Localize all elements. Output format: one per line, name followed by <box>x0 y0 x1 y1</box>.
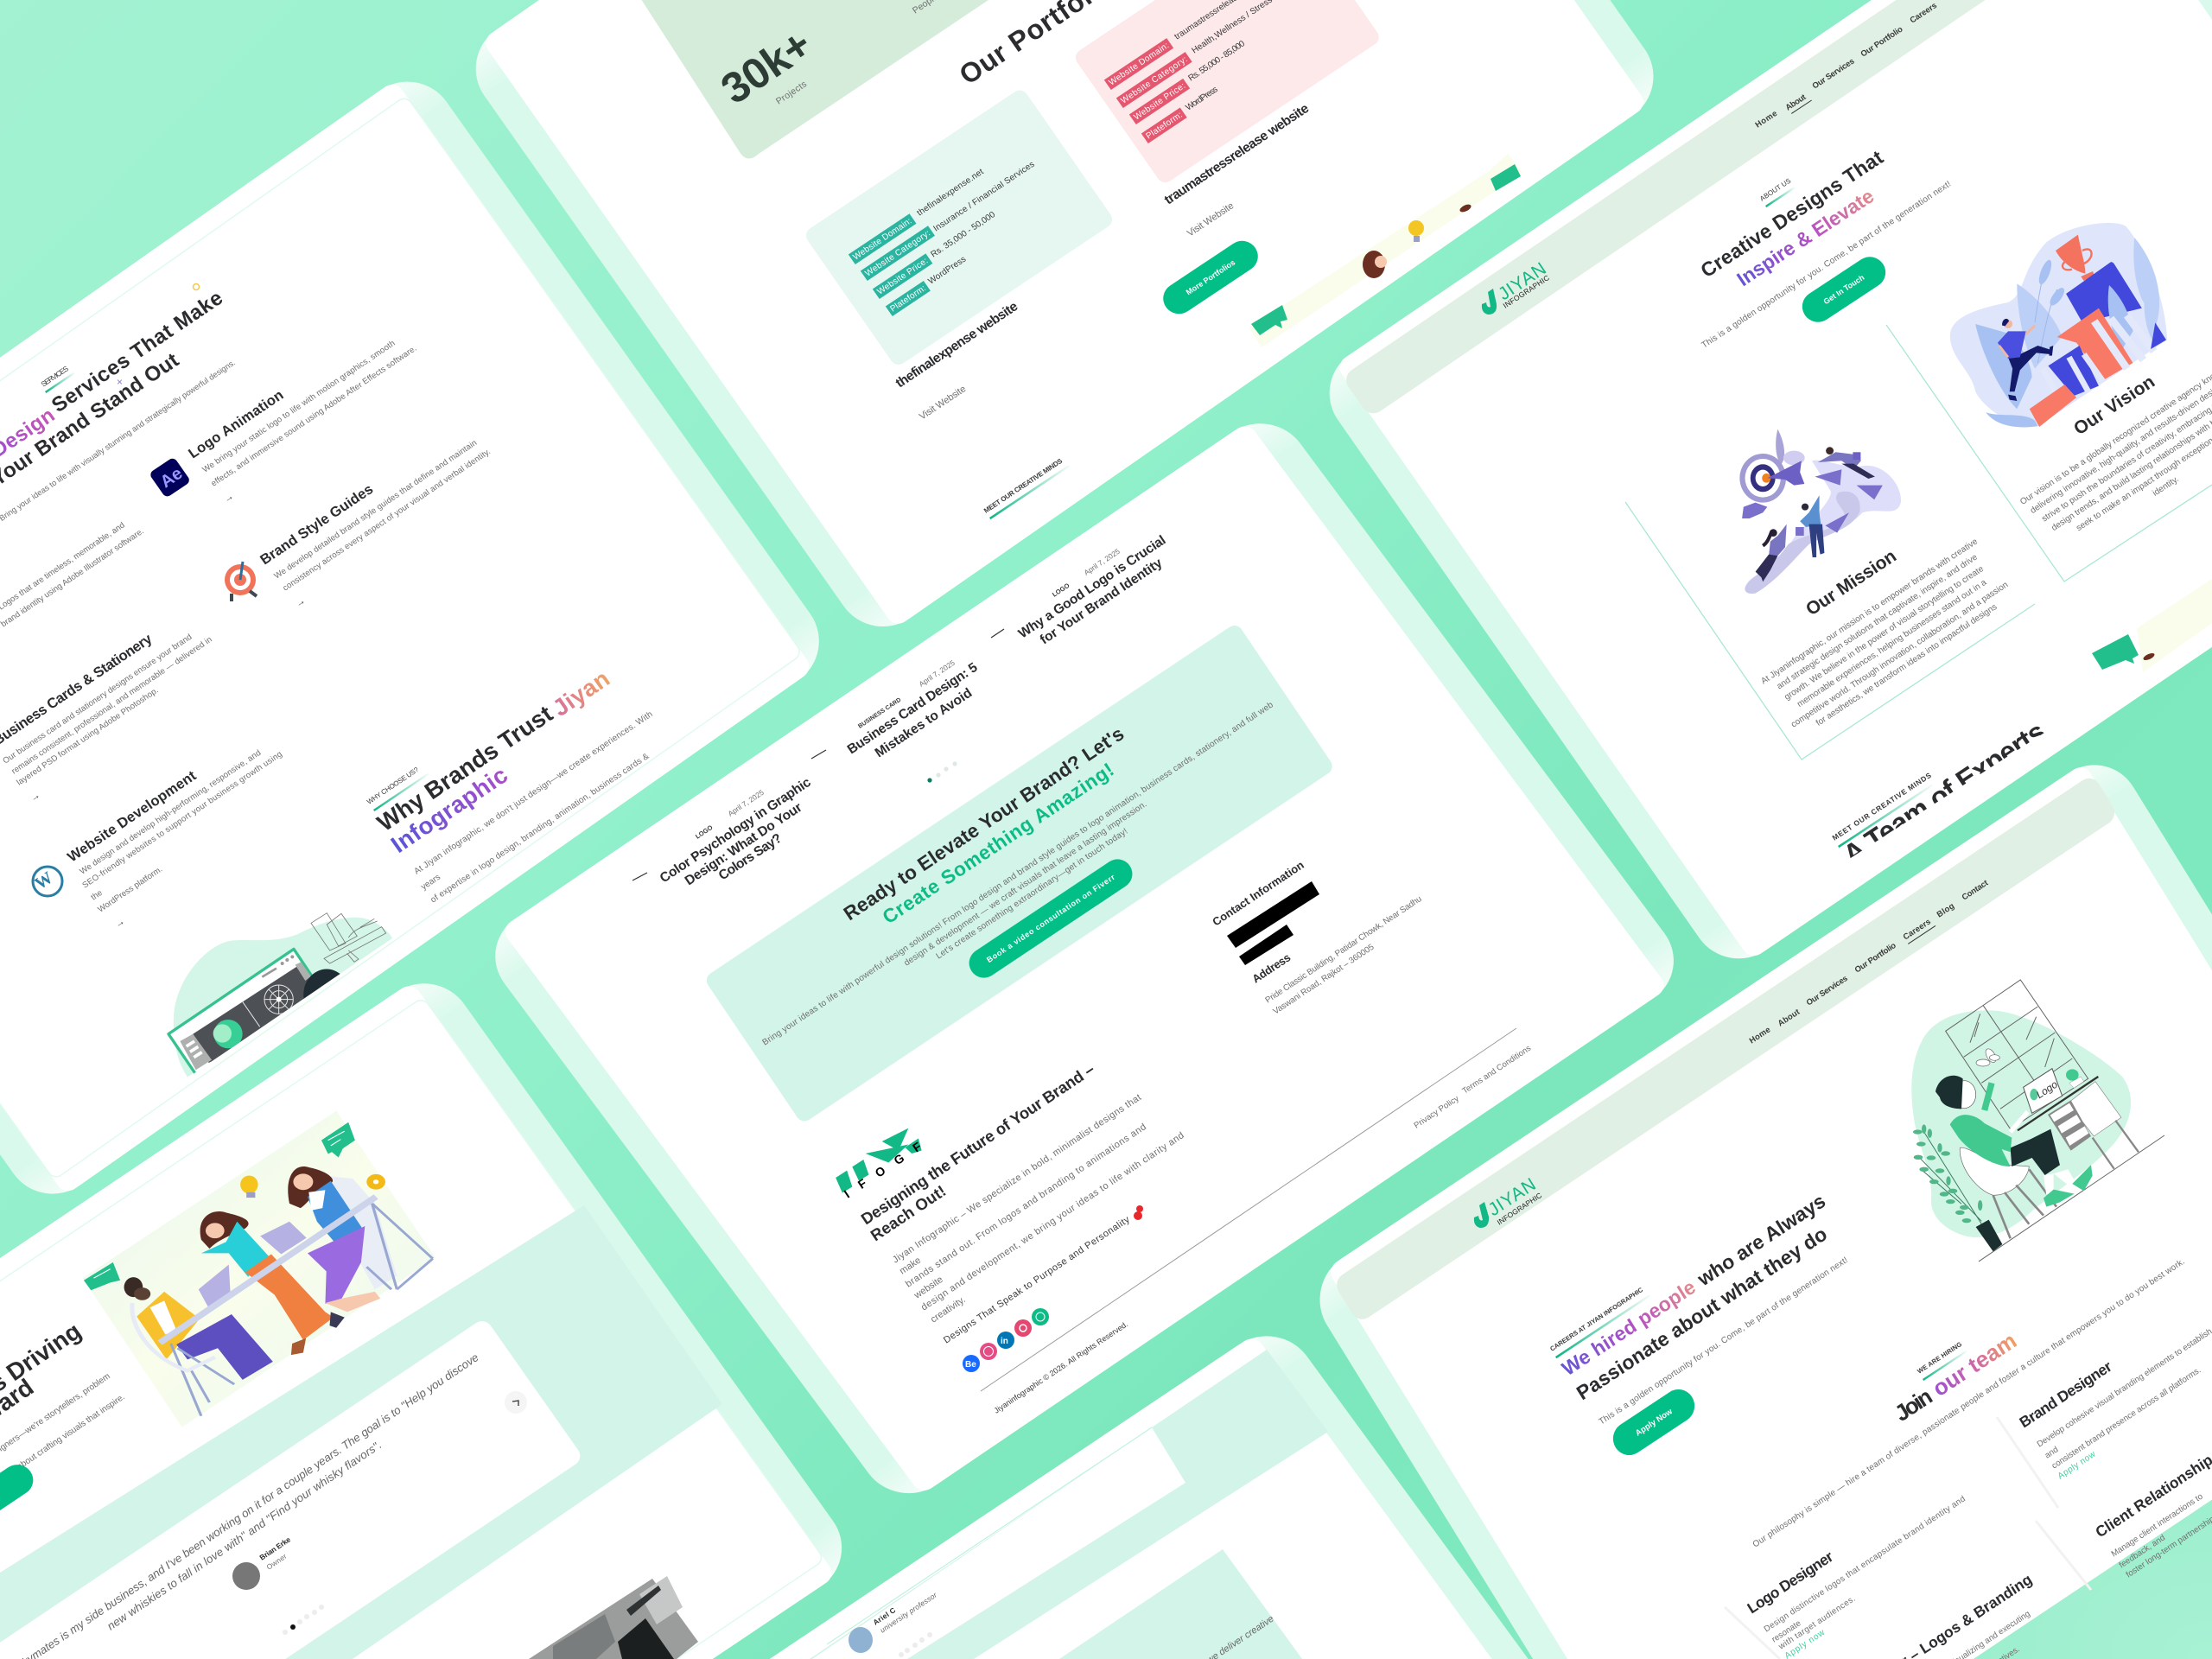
why choose us heading: Jiyan <box>548 664 614 721</box>
mission text: growth. We believe in the power of visual storytelling to create <box>1783 564 1986 702</box>
nav menu: Careers <box>1909 1 1939 25</box>
blog item: color psychology: LOGO <box>694 823 715 841</box>
cta panel <box>703 622 1336 1124</box>
label: services: SERVICES <box>39 364 70 389</box>
service: logo animation: → <box>222 492 236 505</box>
mint section <box>0 1205 722 1659</box>
button: apply now: Apply Now <box>1634 1407 1675 1439</box>
service: brand style guides: Brand Style Guides <box>257 481 376 568</box>
icon: after effects <box>149 456 191 499</box>
carousel arrow <box>505 1391 527 1414</box>
footer description: design and development, we bring your ideas to life with clarity and <box>919 1130 1186 1313</box>
logo: jiyan: JIYAN <box>1495 259 1550 304</box>
why choose us heading: Why Brands Trust <box>372 700 557 836</box>
job: brand designer: Brand Designer <box>2017 1357 2115 1431</box>
icon: target <box>225 562 257 601</box>
mission text <box>1759 537 2010 729</box>
nav menu: Home <box>1754 109 1779 130</box>
nav menu <box>1748 878 1991 1046</box>
why choose us heading: Infographic <box>386 761 512 858</box>
panel: bottom centre testimonials <box>469 1318 1707 1659</box>
label: meet our creative minds: MEET OUR CREATIVE MINDS <box>982 456 1065 515</box>
blog item: color psychology: Color Psychology in Graphic <box>658 775 814 886</box>
job: logo designer: resonate <box>1770 1618 1803 1645</box>
photo <box>529 1576 698 1659</box>
why choose us heading: WHY CHOOSE US? <box>365 766 421 806</box>
card: traumastressrelease: WordPress <box>1184 85 1220 112</box>
about intro text: This is a golden opportunity for you. Come, be part of the generation next! <box>1700 180 1953 350</box>
label: meet our creative minds: MEET OUR CREATIVE MINDS <box>1831 771 1933 842</box>
panel: contact footer <box>476 405 1693 1511</box>
job: brand designer: Develop cohesive visual branding elements to establish <box>2036 1326 2212 1450</box>
carousel dots <box>899 1632 932 1657</box>
footer description: creativity. <box>929 1294 968 1325</box>
card: traumastressrelease: Website Domain: <box>1107 41 1171 87</box>
footer divider <box>981 1028 1516 1391</box>
heading: join our team: Join <box>1890 1382 1937 1427</box>
mission text: At Jiyaninfographic, our mission is to empower brands with creative <box>1759 537 1980 686</box>
vision text: identity. <box>2151 474 2181 499</box>
nav menu: Our Services <box>1805 974 1849 1008</box>
cta text: Bring your ideas to life with powerful design solutions! From logo design and brand style guides to logo animation, business cards, stationery, and full web <box>761 700 1275 1047</box>
illustration: vision <box>1950 223 2167 427</box>
card: traumastressrelease: Website Category: <box>1119 54 1190 105</box>
service: website development: WordPress platform. <box>96 865 164 914</box>
logo: jiyan: JIYAN <box>1484 1174 1540 1220</box>
social icons: Be <box>965 1360 976 1370</box>
mission text: for aesthetics, we transform ideas into impactful designs <box>1815 602 1999 728</box>
button: more portfolios <box>1157 235 1264 320</box>
label: we are hiring: WE ARE HIRING <box>1916 1340 1963 1376</box>
service: business cards: Our business card and stationery designs ensure your brand <box>1 632 194 766</box>
why choose us heading: years <box>419 873 442 892</box>
social icons <box>963 1308 1049 1372</box>
footer heading: Reach Out! <box>867 1181 949 1244</box>
card: thefinalexpense <box>803 87 1116 368</box>
name: ariel c: Ariel C <box>871 1605 897 1627</box>
service: brand style guides: consistency across every aspect of your visual and verbal identity. <box>281 447 493 593</box>
footer description: website <box>912 1274 945 1301</box>
card outlines <box>1625 325 2212 760</box>
mint block <box>1059 1549 1302 1659</box>
service: website development: SEO-friendly websites to support your business growth using <box>80 749 284 890</box>
name: brian erke: Brian Erke <box>257 1535 292 1562</box>
service: website development: the <box>89 888 105 902</box>
heading: driving <box>0 1318 86 1525</box>
service: website development: We design and develop high-performing, responsive, and <box>78 748 263 876</box>
card: thefinalexpense: Rs. 35,000 - 50,000 <box>929 210 997 259</box>
service: brand style guides: → <box>294 596 308 609</box>
mission text: memorable experiences, helping businesses stand out in a <box>1796 578 1989 709</box>
card: traumastressrelease: Plateform: <box>1144 111 1185 141</box>
footer description: Jiyan Infographic – We specialize in bold, minimalist designs that <box>891 1092 1143 1265</box>
job: client relationship: Manage client interactions to <box>2110 1491 2205 1560</box>
contact information: Vaswani Road, Rajkot – 360005 <box>1272 942 1376 1016</box>
cta heading: Ready to Elevate Your Brand? Let's <box>840 722 1128 925</box>
stat: 30k+ projects: 30k+ <box>712 20 820 113</box>
contact information: Pride Classic Building, Patidar Chowk, Near Sadhu <box>1264 894 1424 1005</box>
card: traumastressrelease: Rs. 55,000 - 85,000 <box>1186 39 1247 83</box>
button: book consultation <box>963 854 1138 983</box>
link: visit website: Visit Website <box>918 384 968 422</box>
footer links <box>1413 1044 1533 1130</box>
heading: design services <box>0 286 227 491</box>
service: logo animation: effects, and immersive sound using Adobe After Effects software. <box>209 344 418 488</box>
cta text: Let's create something extraordinary—get in touch today! <box>935 827 1129 961</box>
service: website development: Website Development <box>65 768 200 865</box>
nav menu <box>1754 0 1965 130</box>
copyright: Jiyaninfographic © 2026. All Rights Reserved. <box>993 1319 1129 1415</box>
blog item: why a good logo: for Your Brand Identity <box>1038 556 1166 647</box>
blog item: color psychology: Design: What Do Your <box>683 800 805 888</box>
illustration: team at desk <box>83 1111 435 1427</box>
careers intro text: This is a golden opportunity for you. Come, be part of the generation next! <box>1598 1255 1850 1427</box>
service: logo animation: We bring your static logo to life with motion graphics, smooth <box>200 339 397 474</box>
service: business cards: → <box>29 791 42 804</box>
services intro text: Bring your ideas to life with visually stunning and strategically powerful designs. <box>0 358 237 523</box>
nav menu: Home <box>1748 1025 1772 1046</box>
heading: our mission: Our Mission <box>1802 546 1900 620</box>
job: brand designer: Apply now <box>2056 1449 2098 1482</box>
illustration: designer at desk: Logo <box>2034 1078 2060 1101</box>
panel: services <box>0 63 838 1212</box>
cta text: design & development — we craft visuals that leave a lasting impression. <box>903 799 1148 968</box>
blog item: business card design: BUSINESS CARD <box>857 697 902 730</box>
button: book consultation: Book a video consultation on Fiverr <box>985 873 1116 964</box>
stats block <box>639 0 994 159</box>
heading: a team of experts: A Team of Experts <box>1837 715 2051 871</box>
name: ariel c: university professor <box>878 1590 939 1635</box>
service: business cards: remains consistent, professional, and memorable — delivered in <box>10 635 214 776</box>
nav menu: About <box>1777 1007 1802 1029</box>
nav menu: Our Portfolio <box>1859 24 1905 59</box>
icon: hearts <box>1134 1205 1143 1220</box>
panel: portfolio <box>457 0 1672 645</box>
job: logo designer: Design distinctive logos that encapsulate brand identity and <box>1763 1494 1967 1635</box>
blog item: business card design: Business Card Design: 5 <box>845 660 981 757</box>
footer logo: IFOGF <box>842 1139 925 1200</box>
pagination dots <box>927 761 957 783</box>
service: logo design text: Logos that are timeless, memorable, and <box>0 520 127 612</box>
blog item: color psychology: April 7, 2025 <box>727 788 766 818</box>
footer description: make <box>898 1255 923 1276</box>
social icons: in <box>1001 1337 1008 1346</box>
card: thefinalexpense: thefinalexpense.net <box>915 167 986 218</box>
heading: we hired people: We hired people <box>1558 1275 1700 1380</box>
avatar: ariel c <box>849 1627 873 1653</box>
logo: jiyan <box>1482 259 1551 315</box>
contact information: Address <box>1249 950 1293 985</box>
job: client relationship: feedback, and <box>2118 1533 2167 1571</box>
decoration: yellow ring <box>194 283 199 290</box>
tagline: Designs That Speak to Purpose and Personality <box>942 1214 1132 1345</box>
blog item: why a good logo: LOGO <box>1051 582 1071 599</box>
icon: wordpress: W <box>31 868 56 893</box>
card: thefinalexpense: Insurance / Financial Services <box>931 160 1037 233</box>
job: logo designer: with target audiences. <box>1777 1594 1857 1652</box>
service: business cards: layered PSD format using Adobe Photoshop. <box>15 686 161 787</box>
heading: design services: Services That Make <box>48 286 227 417</box>
label: about us: ABOUT US <box>1758 177 1792 203</box>
illustration: website build <box>168 913 395 1077</box>
heading: creative designs: Creative Designs That <box>1696 146 1887 282</box>
mint section <box>810 1350 1328 1659</box>
panel: careers <box>1302 747 2212 1659</box>
blog item: business card design: Mistakes to Avoid <box>873 686 975 760</box>
illustration: designer at desk <box>1911 980 2164 1262</box>
service: logo animation: Logo Animation <box>186 387 287 461</box>
heading: creative designs: Inspire & Elevate <box>1732 184 1878 290</box>
job: brand designer: and <box>2044 1445 2060 1461</box>
decoration: purple cross: × <box>117 376 123 388</box>
panel: team and testimonials <box>0 965 861 1659</box>
card: thefinalexpense: Website Price: <box>875 257 930 296</box>
heading: our vision: Our Vision <box>2070 372 2158 439</box>
job: logo designer: Logo Designer <box>1745 1548 1836 1617</box>
card title: thefinalexpense website: thefinalexpense website <box>893 299 1021 391</box>
carousel dots <box>283 1605 324 1635</box>
nav menu: Blog <box>1936 901 1956 920</box>
logo: jiyan: INFOGRAPHIC <box>1496 1191 1543 1227</box>
nav menu: About <box>1784 92 1808 112</box>
mission text: competitive world. Through innovation, collaboration, and a passion <box>1789 580 2010 729</box>
nav menu: Contact <box>1961 878 1991 903</box>
nav menu: Our Services <box>1811 57 1856 91</box>
mission text: and strategic design solutions that captivate, inspire, and drive <box>1775 552 1980 691</box>
why choose us heading <box>365 664 655 905</box>
footer description: brands stand out. From logos and branding to animations and <box>904 1122 1148 1289</box>
footer links: Privacy Policy <box>1413 1094 1461 1130</box>
job card outlines <box>1725 1417 2091 1659</box>
job: brand designer: consistent brand presence across all platforms. <box>2050 1365 2202 1471</box>
footer heading: Designing the Future of Your Brand – <box>857 1059 1097 1228</box>
blog item: why a good logo: Why a Good Logo is Crucial <box>1016 533 1168 641</box>
card: traumastressrelease <box>1072 0 1382 186</box>
button: partial <box>0 1459 39 1541</box>
avatar: brian erke <box>232 1562 260 1590</box>
card: thefinalexpense: WordPress <box>926 255 968 286</box>
cta heading: Create Something Amazing! <box>879 759 1118 928</box>
blog item: business card design: April 7, 2025 <box>918 658 957 689</box>
link: visit website: Visit Website <box>1185 200 1236 238</box>
illustration strip <box>2092 579 2212 672</box>
button: get in touch: Get In Touch <box>1822 273 1866 306</box>
testimonial card <box>812 1427 1185 1659</box>
heading: we hired people: who are Always <box>1693 1189 1829 1291</box>
card title: traumastressrelease website: traumastressrelease website <box>1162 101 1312 207</box>
logo: jiyan <box>1474 1174 1543 1228</box>
footer links: Terms and Conditions <box>1461 1044 1533 1096</box>
blog item: color psychology: Colors Say? <box>716 831 785 883</box>
card: traumastressrelease: Website Price: <box>1132 81 1187 122</box>
testimonial card: new whiskies to fall in love with" and "Find your whisky flavors". <box>105 1438 384 1632</box>
service: website development: → <box>113 917 127 930</box>
card top line <box>827 1427 1152 1644</box>
service: brand style guides: We develop detailed brand style guides that define and maintain <box>272 438 479 581</box>
label: careers: CAREERS AT JIYAN INFOGRAPHIC <box>1548 1286 1644 1353</box>
stat: 30k+ projects: Projects <box>774 79 809 106</box>
why choose us heading: At Jiyan infographic, we don't just design—we create experiences. With <box>412 709 655 876</box>
button: get in touch <box>1796 251 1891 328</box>
contact information: Contact Information <box>1210 858 1306 928</box>
heading: we hired people: Passionate about what they do <box>1573 1222 1831 1404</box>
careers philosophy text: Our philosophy is simple — hire a team of diverse, passionate people and foster a culture that empowers you to do you best work. <box>1751 1257 2186 1550</box>
contact information <box>1210 858 1424 1016</box>
icon: after effects: Ae <box>157 464 186 492</box>
heading: join our team: our team <box>1928 1327 2021 1402</box>
button: apply now <box>1607 1383 1700 1461</box>
name: brian erke: Owner <box>264 1552 289 1572</box>
card: thefinalexpense: Website Category: <box>863 229 932 278</box>
why choose us heading: of expertise in logo design, branding, animation, business cards & <box>429 752 652 905</box>
panel: about <box>1311 0 2212 977</box>
button: more portfolios: More Portfolios <box>1185 258 1236 296</box>
service: logo design text: brand identity using Adobe Illustrator software. <box>0 526 146 629</box>
card: thefinalexpense: Plateform: <box>888 283 928 314</box>
blog item: why a good logo: April 7, 2025 <box>1083 547 1122 577</box>
heading: join our team <box>1890 1327 2021 1427</box>
card: thefinalexpense: Website Domain: <box>851 217 913 262</box>
logo: jiyan: INFOGRAPHIC <box>1502 273 1551 310</box>
nav menu: Our Portfolio <box>1853 941 1898 976</box>
illustration strip <box>1249 154 1522 347</box>
nav menu: Careers <box>1902 917 1933 943</box>
illustration: mission <box>1739 429 1901 594</box>
